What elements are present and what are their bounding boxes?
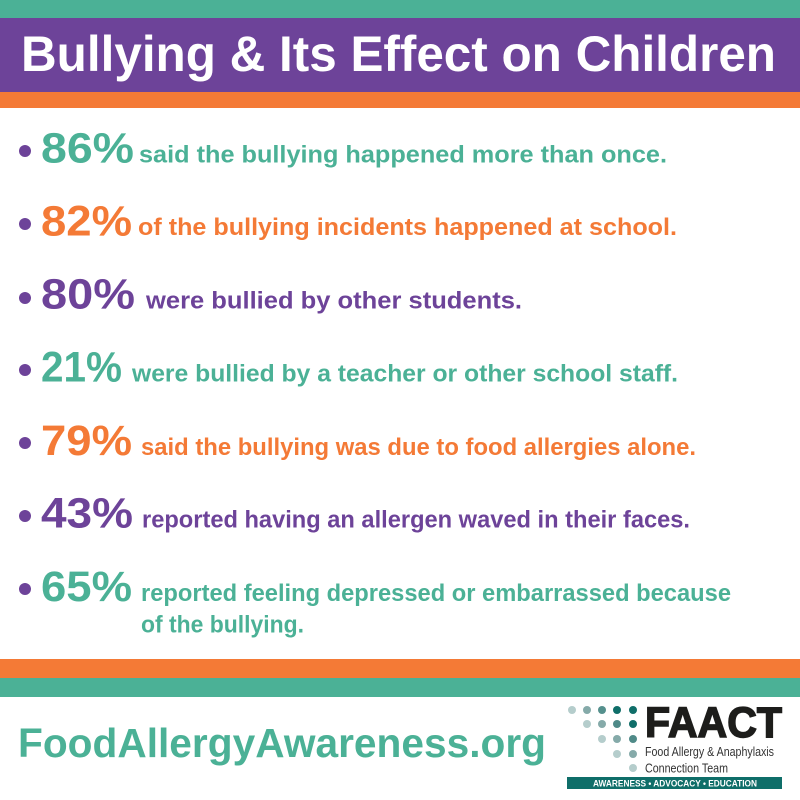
stat: 86%: said the bullying happened more than once.: [139, 142, 667, 168]
stat: 80%: [19, 270, 522, 318]
stat: 79%: said the bullying was due to food allergies alone.: [141, 434, 696, 461]
stat: 79%: [19, 417, 696, 465]
stat: 65%: reported feeling depressed or embarrassed because: [141, 580, 731, 607]
top teal band: [0, 0, 800, 18]
bottom orange band: [0, 659, 800, 678]
stat: 21%: 21%: [41, 344, 122, 392]
FAACT logo: AWARENESS • ADVOCACY • EDUCATION: [593, 778, 757, 788]
stat: 86%: 86%: [41, 124, 134, 172]
FAACT logo: [567, 699, 782, 789]
title banner: [0, 18, 800, 92]
orange band under title: [0, 92, 800, 108]
stat: 43%: reported having an allergen waved in their faces.: [142, 506, 690, 534]
stat: 65%: [19, 563, 731, 638]
stat: 82%: of the bullying incidents happened at school.: [138, 214, 677, 241]
logo tagline bar: [567, 777, 782, 789]
stat: 65%: 65%: [41, 563, 132, 611]
FAACT logo: Connection Team: [645, 762, 728, 776]
logo wordmark: FAACT: [645, 699, 782, 747]
stat: 82%: 82%: [41, 198, 132, 246]
stat: 43%: [19, 490, 690, 538]
stat: 21%: [19, 344, 678, 392]
stat: 65%: of the bullying.: [141, 612, 304, 638]
stat: 86%: [19, 124, 667, 172]
icon: dot grid: [568, 706, 637, 772]
bottom teal band: [0, 678, 800, 697]
stat: 79%: 79%: [41, 417, 132, 465]
title: Bullying & Its Effect on Children: [21, 26, 776, 82]
stat: 21%: were bullied by a teacher or other school staff.: [131, 360, 678, 388]
stat: 82%: [19, 198, 677, 246]
stat: 43%: 43%: [41, 490, 133, 538]
logo subtitle: Food Allergy & Anaphylaxis: [645, 745, 774, 759]
stat: 80%: were bullied by other students.: [145, 288, 522, 314]
website url: FoodAllergyAwareness.org: [18, 720, 546, 766]
stat: 80%: 80%: [41, 270, 135, 318]
